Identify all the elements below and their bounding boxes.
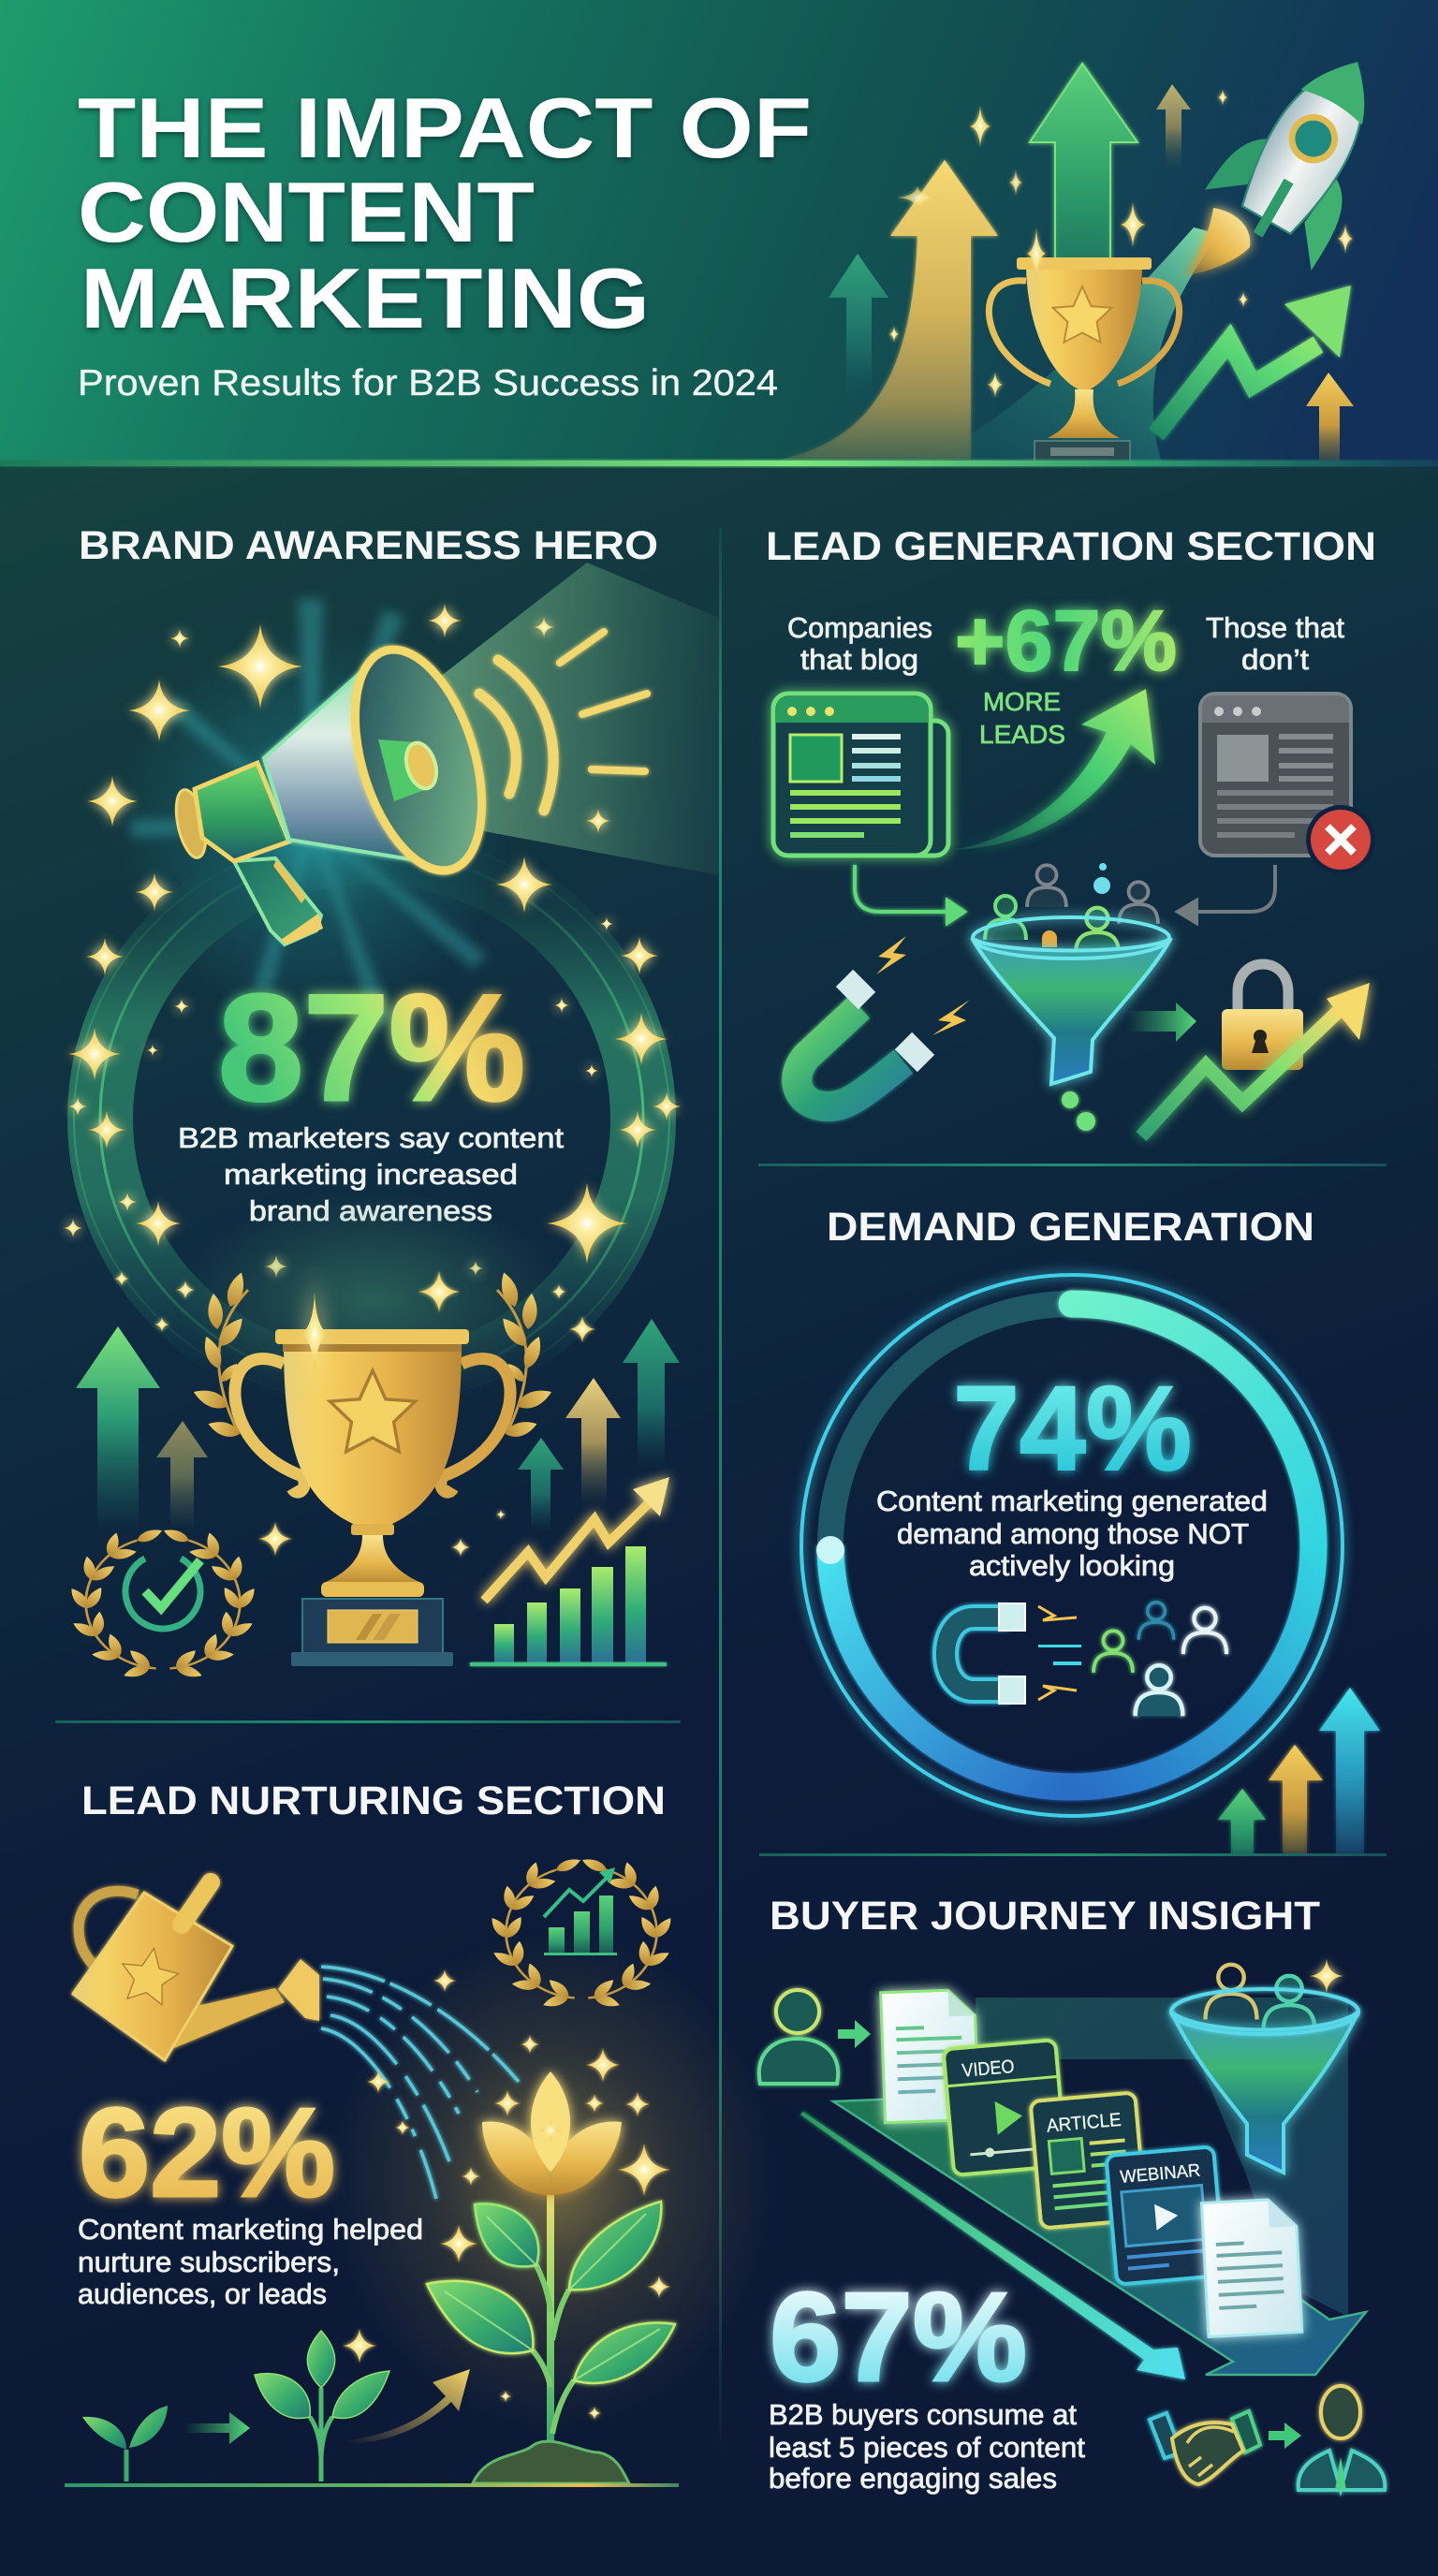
text: more leads — [979, 687, 1065, 749]
text: those that don't — [1206, 611, 1344, 676]
icon: megaphone — [171, 635, 506, 944]
icon: tall gold arrow — [780, 160, 998, 460]
icon: tall green arrow — [1030, 64, 1137, 267]
icon: document — [881, 1989, 978, 2123]
text: nurturing description: audiences, or leads — [78, 2277, 327, 2310]
journey thin arrow — [800, 2112, 1185, 2379]
icon: large plant with leaves — [427, 2190, 675, 2441]
plant glow — [328, 1928, 777, 2434]
arrow: funnel to lock — [1127, 1003, 1196, 1042]
card: article — [1031, 2092, 1146, 2229]
sparkle: trophy glint — [300, 1292, 330, 1376]
text: nurturing description: nurture subscribers, — [78, 2246, 340, 2278]
icon: people entering funnel — [985, 863, 1158, 954]
icon: medium plant — [255, 2331, 389, 2481]
stat: +67%: +67% — [955, 593, 1177, 689]
icon: watering can — [73, 1882, 319, 2060]
title — [78, 81, 812, 346]
icon: audience people — [1093, 1603, 1226, 1716]
icon: document end — [1201, 2198, 1302, 2336]
label: webinar: WEBINAR — [1120, 2161, 1201, 2188]
icon: lightning bolts — [876, 936, 970, 1035]
text: demand description: actively looking — [969, 1549, 1175, 1582]
panel: buyer journey — [759, 1894, 1385, 2495]
sparkles: brand awareness — [64, 604, 681, 1278]
arrow: green connector — [855, 865, 964, 923]
sparkles: header — [889, 89, 1353, 398]
arrow: grey connector — [1178, 865, 1275, 923]
icon: sound waves — [479, 632, 647, 811]
stat: 74%: 74% — [953, 1362, 1192, 1496]
title: MARKETING — [81, 252, 650, 346]
icon: laurel with bar chart — [488, 1855, 675, 2010]
text: companies that blog — [787, 611, 932, 676]
stat: 87%: 87% — [218, 963, 525, 1133]
trophy backdrop glow — [176, 1189, 569, 1413]
icon: main trophy — [235, 1329, 510, 1666]
heading: buyer journey: BUYER JOURNEY INSIGHT — [770, 1894, 1320, 1939]
icon: zigzag green arrow — [1156, 285, 1351, 434]
heading: lead nurturing: LEAD NURTURING SECTION — [81, 1778, 666, 1823]
icon: falling drops — [1062, 1091, 1095, 1131]
demand divider — [759, 1853, 1387, 1856]
icon: salesperson — [1299, 2386, 1385, 2490]
decorative ring — [74, 833, 669, 1404]
icon: arrows right — [518, 1319, 680, 1532]
title: THE IMPACT OF — [78, 81, 812, 176]
panel: demand generation — [759, 1205, 1387, 1856]
icon: zigzag arrow to lock — [1141, 983, 1370, 1136]
text: demand description: demand among those NOT — [897, 1517, 1249, 1550]
header glow line — [0, 461, 1438, 466]
panel: lead nurturing — [65, 1778, 777, 2487]
panel: header — [0, 0, 1438, 466]
text: companies that blog: Companies — [787, 611, 932, 644]
text: brand awareness description: B2B marketers say content — [178, 1121, 564, 1154]
icon: green blog document — [773, 694, 948, 856]
left divider — [55, 1720, 681, 1723]
icon: handshake — [1150, 2411, 1260, 2484]
card: webinar — [1106, 2146, 1225, 2285]
icon: three rising arrows — [1218, 1688, 1380, 1853]
light beam — [399, 563, 719, 875]
icon: water stream — [321, 1967, 519, 2199]
arrow: curved gold growth — [345, 2369, 470, 2443]
text: more leads: MORE — [983, 687, 1061, 716]
text: brand awareness description — [178, 1121, 564, 1227]
text: brand awareness description: marketing increased — [224, 1158, 518, 1191]
icon: grey document — [1200, 694, 1351, 856]
text: those that don't: don’t — [1241, 643, 1309, 676]
megaphone light rays — [131, 599, 487, 1026]
icon: rocket trail — [922, 227, 1220, 461]
text: those that don't: Those that — [1206, 611, 1344, 644]
icon: red x badge — [1306, 805, 1375, 874]
icon: laurels around trophy — [191, 1270, 554, 1441]
megaphone glow — [117, 627, 510, 1020]
icon: curved growth arrow — [953, 689, 1155, 850]
stat: 67%: 67% — [770, 2266, 1027, 2408]
heading: lead generation: LEAD GENERATION SECTION — [766, 524, 1376, 569]
journey backdrop — [976, 1998, 1348, 2317]
text: buyer description — [769, 2398, 1085, 2495]
heading: brand awareness hero: BRAND AWARENESS HERO — [79, 523, 658, 568]
icon: magnetic pull marks — [1038, 1606, 1081, 1700]
text: companies that blog: that blog — [800, 643, 918, 676]
text: nurturing description: Content marketing helped — [78, 2213, 423, 2246]
chart: 74% progress ring — [801, 1275, 1343, 1816]
arrow: handshake to salesperson — [1269, 2422, 1301, 2449]
sparkles: nurturing — [343, 1969, 670, 2420]
label: article: ARTICLE — [1046, 2110, 1123, 2137]
arrow: buyer to content — [838, 2020, 871, 2048]
icon: buyer person — [759, 1990, 838, 2084]
label: video: VIDEO — [961, 2056, 1015, 2082]
chart: growth bars — [470, 1546, 667, 1666]
icon: small olive arrow — [1156, 84, 1191, 170]
vertical divider — [719, 529, 722, 2457]
subtitle: Proven Results for B2B Success in 2024 — [78, 363, 778, 403]
icon: small sprout — [82, 2406, 168, 2481]
icon: glowing flower — [482, 2071, 622, 2195]
ground line — [65, 2483, 679, 2487]
text: brand awareness description: brand awareness — [249, 1194, 492, 1227]
text: nurturing description — [78, 2213, 423, 2310]
icon: padlock — [1222, 964, 1303, 1070]
lead generation divider — [758, 1164, 1387, 1166]
text: buyer description: B2B buyers consume at — [769, 2398, 1077, 2431]
journey ribbon arrow — [833, 2097, 1366, 2375]
icon: rocket — [1183, 29, 1414, 275]
text: demand description: Content marketing generated — [876, 1485, 1268, 1517]
icon: small gold arrow — [1306, 373, 1354, 461]
icon: magnet — [797, 970, 934, 1106]
icon: arrows left — [76, 1326, 208, 1532]
icon: soil mound — [473, 2441, 629, 2483]
text: demand description — [876, 1485, 1268, 1582]
icon: funnel — [972, 917, 1171, 1084]
text: buyer description: before engaging sales — [769, 2462, 1057, 2495]
icon: header trophy — [989, 257, 1180, 461]
icon: laurel wreath with checkmark — [67, 1526, 258, 1680]
icon: buyer funnel — [1171, 1959, 1358, 2173]
text: buyer description: least 5 pieces of content — [769, 2431, 1085, 2464]
text: more leads: LEADS — [979, 720, 1065, 749]
stat: 62%: 62% — [79, 2082, 335, 2223]
sparkles: trophy area — [114, 1271, 595, 1557]
icon: blue magnet — [946, 1603, 1025, 1704]
arrow: sprout to plant — [183, 2412, 250, 2444]
panel: brand awareness hero — [55, 523, 719, 1723]
panel: lead generation — [758, 524, 1387, 1166]
icon: faded green arrow — [829, 254, 888, 411]
card: video — [943, 2040, 1066, 2175]
title: CONTENT — [78, 166, 535, 260]
icon: gold trend line — [484, 1477, 669, 1601]
heading: demand generation: DEMAND GENERATION — [827, 1205, 1314, 1250]
